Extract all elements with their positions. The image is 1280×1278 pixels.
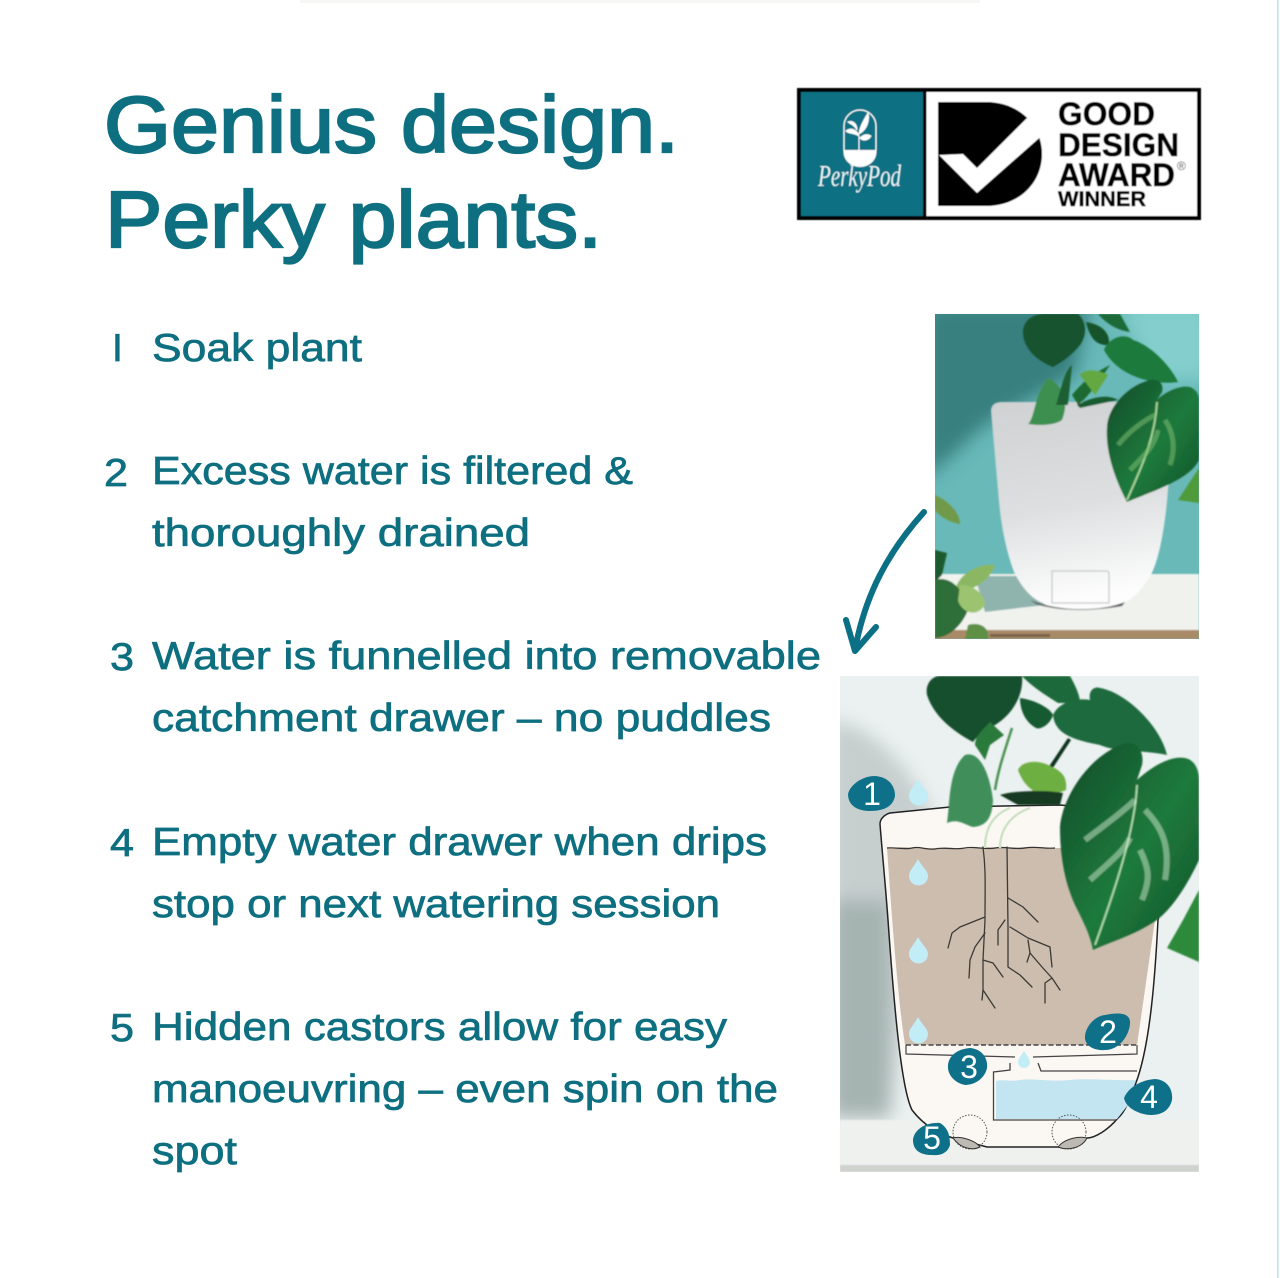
- badge 1: [848, 776, 895, 812]
- step 3: 3: [110, 636, 134, 679]
- badge 3: [948, 1048, 987, 1085]
- title: Perky plants.: [105, 175, 602, 264]
- badge 4: 4: [1140, 1079, 1158, 1115]
- step 5: Hidden castors allow for easy: [152, 1006, 728, 1049]
- step 1: I: [112, 327, 123, 370]
- castors: [953, 1115, 1087, 1149]
- award wordmark: GOOD: [1058, 96, 1155, 132]
- badge 5: 5: [923, 1120, 941, 1156]
- step 3: [110, 635, 821, 740]
- step 4: Empty water drawer when drips: [152, 821, 767, 864]
- badge 1: 1: [863, 776, 881, 812]
- photo: white pot on shelf: [935, 314, 1199, 639]
- step 5: manoeuvring – even spin on the: [152, 1068, 778, 1111]
- step 4: [110, 821, 767, 926]
- step 5: spot: [152, 1130, 237, 1173]
- curved arrow: [846, 512, 924, 651]
- PerkyPod logo panel: [801, 90, 926, 218]
- soil: [887, 847, 1163, 1045]
- step 3: Water is funnelled into removable: [152, 635, 821, 678]
- number badges: [848, 776, 1172, 1156]
- step 2: [104, 450, 633, 555]
- water drawer: [994, 1063, 1137, 1120]
- step 2: 2: [104, 452, 128, 495]
- badge 2: [1085, 1014, 1130, 1050]
- step 4: stop or next watering session: [152, 883, 720, 926]
- roots: [948, 847, 1060, 1008]
- shelf: [935, 574, 1199, 630]
- wall: [935, 314, 1199, 639]
- badge 5: [913, 1120, 950, 1156]
- background: [840, 676, 1199, 1172]
- diagram: cutaway pot: [830, 676, 1199, 1172]
- award wordmark: [1058, 96, 1186, 211]
- translucent stems: [985, 808, 1030, 848]
- award wordmark: ®: [1177, 159, 1186, 173]
- good design mark: [938, 102, 1046, 206]
- title: Genius design.: [104, 80, 679, 169]
- step 1: Soak plant: [152, 327, 362, 370]
- PerkyPod logo panel: PerkyPod: [817, 158, 901, 193]
- award wordmark: DESIGN: [1058, 127, 1179, 163]
- award wordmark: AWARD: [1058, 157, 1175, 193]
- badge 2: 2: [1099, 1014, 1117, 1050]
- pot: [991, 402, 1175, 609]
- step 3: catchment drawer – no puddles: [152, 697, 771, 740]
- step 2: Excess water is filtered &: [152, 450, 633, 493]
- monstera leaves: [1023, 314, 1085, 367]
- top shadow strip: [300, 0, 980, 3]
- award wordmark: WINNER: [1058, 188, 1146, 211]
- title: [104, 80, 679, 264]
- pot outline and body: [880, 805, 1175, 1147]
- step 4: 4: [110, 822, 134, 865]
- water drops: [909, 779, 1030, 1068]
- step 2: thoroughly drained: [152, 512, 530, 555]
- right edge line: [1277, 0, 1278, 1278]
- foliage: [927, 676, 1199, 962]
- step 5: [110, 1006, 778, 1173]
- badge 4: [1124, 1079, 1172, 1115]
- badge 3: 3: [960, 1049, 978, 1085]
- award badge: [799, 90, 1199, 218]
- left foliage: [935, 495, 960, 524]
- step 5: 5: [110, 1007, 134, 1050]
